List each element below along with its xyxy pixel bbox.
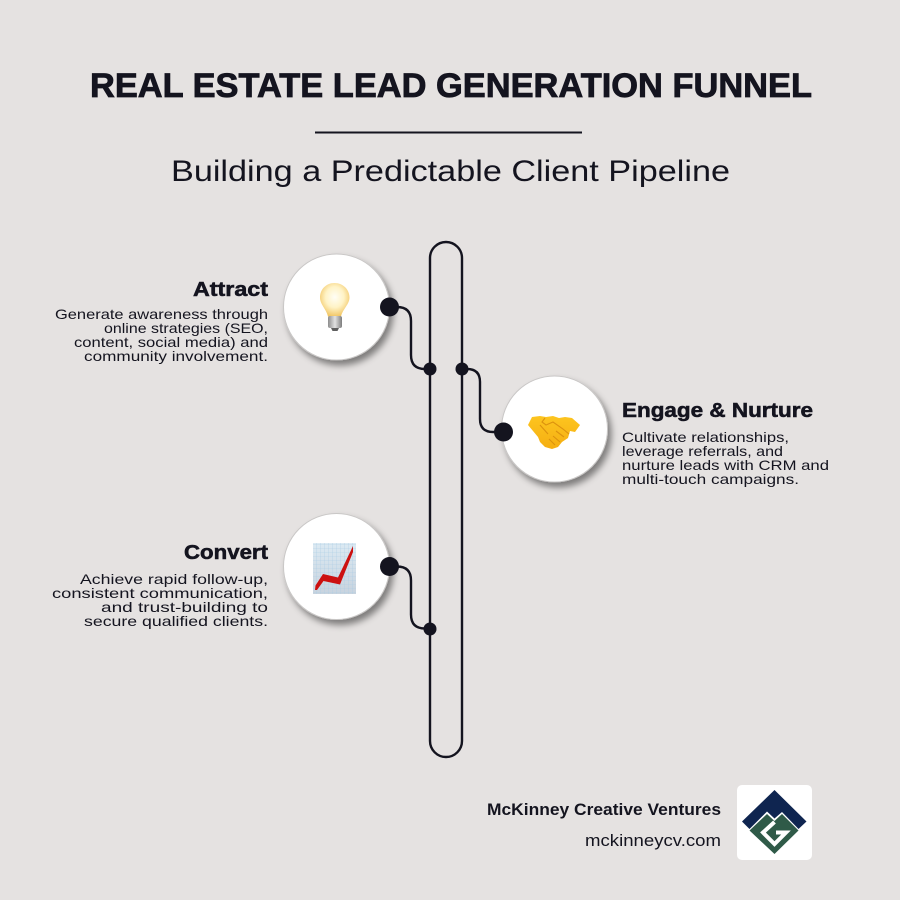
convert description: secure qualified clients. — [84, 613, 268, 629]
convert heading: Convert — [184, 542, 268, 564]
panel: engage and nurture — [456, 362, 829, 487]
attract description: community involvement. — [84, 348, 268, 364]
icon: light bulb — [320, 283, 350, 331]
convert connector — [380, 557, 436, 636]
attract description: content, social media) and — [74, 334, 268, 350]
icon: handshake — [528, 416, 580, 449]
engage description — [622, 429, 829, 487]
funnel pipeline — [430, 242, 462, 757]
footer company name: McKinney Creative Ventures — [487, 800, 721, 819]
attract description: online strategies (SEO, — [104, 320, 268, 336]
engage description: leverage referrals, and — [622, 443, 783, 459]
attract connector — [380, 298, 436, 376]
convert description: Achieve rapid follow-up, — [80, 571, 268, 587]
attract circle — [284, 254, 390, 360]
convert description — [52, 571, 268, 629]
attract description — [55, 306, 268, 364]
attract description: Generate awareness through — [55, 306, 268, 322]
panel: convert — [52, 514, 436, 636]
logo — [737, 785, 812, 860]
title: REAL ESTATE LEAD GENERATION FUNNEL — [90, 67, 812, 105]
convert description: and trust-building to — [101, 599, 268, 615]
engage description: Cultivate relationships, — [622, 429, 789, 445]
engage description: nurture leads with CRM and — [622, 457, 829, 473]
convert description: consistent communication, — [52, 585, 268, 601]
engage connector — [456, 362, 513, 442]
convert circle — [284, 514, 390, 620]
subtitle: Building a Predictable Client Pipeline — [171, 155, 730, 188]
panel: attract — [55, 254, 436, 376]
icon: chart — [313, 543, 356, 594]
engage description: multi-touch campaigns. — [622, 471, 799, 487]
engage heading: Engage & Nurture — [622, 400, 813, 422]
attract heading: Attract — [193, 279, 268, 301]
footer website: mckinneycv.com — [585, 831, 721, 850]
engage circle — [502, 376, 608, 482]
